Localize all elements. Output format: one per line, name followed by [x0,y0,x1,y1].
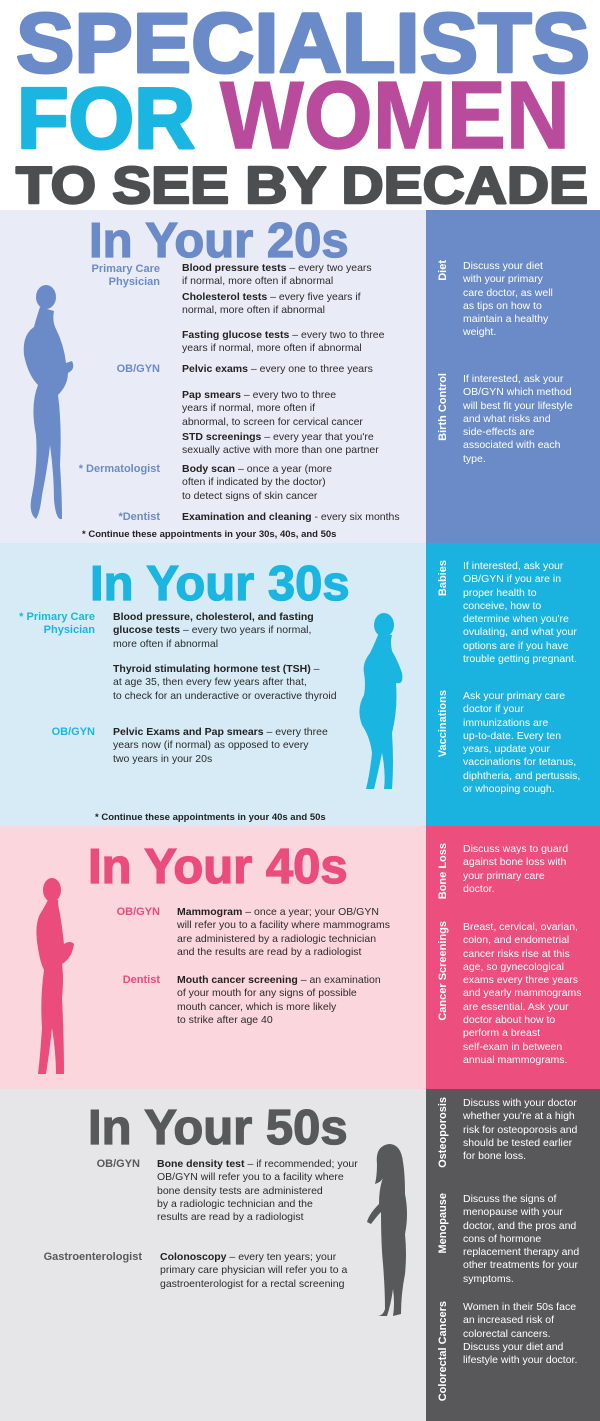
panel: 40s [0,826,600,1089]
panel: 20s: OB/GYN which method [463,386,572,398]
panel: 30s: Thyroid stimulating hormone test (TSH) – [113,663,320,675]
panel: 50s: lifestyle with your doctor. [463,1354,577,1366]
panel: 20s: Body scan – once a year (more [182,463,332,475]
panel: 20s: Fasting glucose tests – every two to three [182,329,384,341]
panel: 50s: results are read by a radiologist [157,1211,304,1223]
panel: 50s: Women in their 50s face [463,1301,576,1313]
panel: 30s: Ask your primary care [463,690,565,702]
panel: 30s: two years in your 20s [113,753,212,765]
panel: 40s: Mammogram – once a year; your OB/GYN [177,906,379,918]
sidebar items 20s: Diet [437,260,449,281]
panel: 40s: exams every three years [463,974,578,986]
sidebar 20s [426,210,600,543]
panel: 40s: age, so gynecological [463,961,564,973]
panel: 20s: side-effects are [463,426,535,438]
panel: 20s: Examination and cleaning - every six months [182,511,400,523]
panel: 50s: whether you're at a high [463,1110,575,1122]
panel: 50s: cons of hormone [463,1233,541,1245]
heading 40s: In Your 40s [88,840,348,894]
panel: 20s: STD screenings – every year that you're [182,431,374,443]
panel: 20s: If interested, ask your [463,373,563,385]
labels and tests 20s: Physician [109,276,160,288]
panel: 30s: diphtheria, and pertussis, [463,770,580,782]
panel: 30s: doctor if your [463,703,524,715]
panel: 40s: mouth cancer, which is more likely [177,1001,336,1013]
title line 2 [17,62,570,169]
panel: 40s: Cancer Screenings [437,921,449,1021]
labels and tests 30s [19,611,95,636]
panel: 40s: will refer you to a facility where mammograms [177,919,390,931]
panel: 20s: Pap smears – every two to three [182,389,336,401]
panel: 50s: bone density tests are administered [157,1185,323,1197]
panel: 40s: Breast, cervical, ovarian, [463,921,578,933]
panel: 20s: Pelvic exams – every one to three years [182,363,373,375]
panel: 40s: doctor about how to [463,1014,555,1026]
panel: 20s: Birth Control [437,373,449,441]
silhouette 30s [359,613,402,789]
labels and tests 40s: OB/GYN [117,906,160,918]
labels and tests 20s [92,263,160,288]
panel: 30s: Blood pressure, cholesterol, and fasting [113,611,314,623]
panel: 30s: glucose tests – every two years if normal, [113,624,311,636]
panel: 50s: Discuss the signs of [463,1193,556,1205]
title line 2: FOR [17,71,195,167]
panel: 50s: replacement therapy and [463,1246,579,1258]
panel: 50s: Discuss your diet and [463,1341,563,1353]
panel: 50s: for bone loss. [463,1150,526,1162]
panel: 50s: other treatments for your [463,1259,578,1271]
panel: 20s: years if normal, more often if [182,402,315,414]
silhouette 50s [367,1144,407,1316]
panel: 50s: should be tested earlier [463,1137,572,1149]
panel: 50s: gastroenterologist for a rectal screening [160,1278,344,1290]
silhouette 20s [24,285,74,520]
panel: 40s: and the results are read by a radiologist [177,946,361,958]
panel: 20s: often if indicated by the doctor) [182,476,326,488]
heading 20s: In Your 20s [89,214,349,268]
panel: 40s: Discuss ways to guard [463,843,568,855]
panel: 30s [0,543,600,826]
panel: 50s: symptoms. [463,1273,514,1285]
panel: 20s: to detect signs of skin cancer [182,490,317,502]
panel: 30s: trouble getting pregnant. [463,653,577,665]
panel: 20s: Discuss your diet [463,260,543,272]
panel: 20s: Cholesterol tests – every five years if [182,291,361,303]
panel: 40s: of your mouth for any signs of possible [177,987,357,999]
panel: 50s: Menopause [437,1193,449,1254]
panel: 50s: menopause with your [463,1206,563,1218]
panel: 20s: if normal, more often if abnormal [182,275,333,287]
panel: 50s [0,1089,600,1421]
panel: 50s: Gastroenterologist [44,1251,142,1263]
panel: 20s: OB/GYN [117,363,160,375]
panel: 40s: to strike after age 40 [177,1014,273,1026]
panel: 40s: perform a breast [463,1027,540,1039]
panel: 30s: or whooping cough. [463,783,555,795]
panel: 40s: self-exam in between [463,1041,562,1053]
panel: 20s: weight. [463,326,496,338]
panel: 40s: Mouth cancer screening – an examination [177,974,381,986]
sidebar items 40s: Bone Loss [437,843,449,899]
panel: 50s: Discuss with your doctor [463,1097,577,1109]
panel: 40s: your primary care [463,870,545,882]
panel: 30s: Pelvic Exams and Pap smears – every three [113,726,328,738]
note 30s: * Continue these appointments in your 40s and 50s [95,812,326,823]
panel: 20s [0,210,600,543]
panel: 30s: up-to-date. Every ten [463,730,561,742]
panel: 20s: will best fit your lifestyle [463,400,573,412]
panel: 30s: OB/GYN if you are in [463,573,561,585]
panel: 30s: at age 35, then every few years after that, [113,676,307,688]
panel: 40s: colon, and endometrial [463,934,569,946]
panel: 30s: ovulating, and what your [463,626,577,638]
panel: 20s: with your primary [463,273,543,285]
panel: 50s: an increased risk of [463,1314,554,1326]
labels and tests 20s: Primary Care [92,263,160,275]
panel: 30s: immunizations are [463,717,548,729]
panel: 30s: years, update your [463,743,550,755]
panel: 40s: against bone loss with [463,856,566,868]
panel: 50s: colorectal cancers. [463,1328,551,1340]
panel: 30s: proper health to [463,587,537,599]
heading 50s: In Your 50s [88,1101,348,1155]
panel: 30s: more often if abnormal [113,638,218,650]
panel: 30s: vaccinations for tetanus, [463,756,576,768]
panel: 30s: to check for an underactive or overactive thyroid [113,690,337,702]
panel: 50s: Colorectal Cancers [437,1301,449,1401]
labels and tests 30s: Physician [44,624,95,636]
heading 30s: In Your 30s [90,557,350,611]
panel: 30s: options are if you have [463,640,569,652]
panel: 20s: * Dermatologist [79,463,160,475]
panel: 20s: associated with each [463,439,560,451]
panel: 30s: OB/GYN [52,726,95,738]
panel: 20s: years if normal, more often if abnormal [182,342,362,354]
panel: 20s: maintain a healthy [463,313,548,325]
labels and tests 30s: * Primary Care [19,611,95,623]
panel: 50s: doctor, and the pros and [463,1220,576,1232]
panel: 40s: and yearly mammograms [463,987,581,999]
panel: 30s: If interested, ask your [463,560,563,572]
panel: 40s: Dentist [123,974,160,986]
panel: 20s: abnormal, to screen for cervical cancer [182,416,363,428]
panel: 30s: years now (if normal) as opposed to every [113,739,309,751]
sidebar 30s [426,543,600,826]
panel: 20s: Blood pressure tests – every two years [182,262,372,274]
panel: 30s: conceive, how to [463,600,541,612]
panel: 50s: Colonoscopy – every ten years; your [160,1251,336,1263]
panel: 20s: and what risks and [463,413,551,425]
panel: 50s: Bone density test – if recommended; your [157,1158,358,1170]
panel: 40s: are essential. Ask your [463,1001,569,1013]
panel: 20s: care doctor, as well [463,287,553,299]
sidebar items 30s: Babies [437,560,449,596]
panel: 50s: by a radiologic technician and the [157,1198,313,1210]
panel: 20s: normal, more often if abnormal [182,304,325,316]
sidebar 50s [426,1089,600,1421]
panel: 40s: doctor. [463,883,495,895]
panel: 40s: cancer risks rise at this [463,948,570,960]
panel: 40s: are administered by a radiologic technician [177,933,376,945]
panel: 30s: Vaccinations [437,690,449,757]
panel: 20s: as tips on how to [463,300,542,312]
sidebar items 50s: Osteoporosis [437,1097,449,1168]
labels and tests 50s: OB/GYN [97,1158,140,1170]
title [15,0,590,210]
title line 2: WOMEN [220,62,570,169]
panel: 20s: sexually active with more than one partner [182,444,379,456]
panel: 20s: type. [463,453,486,465]
silhouette 40s [36,878,74,1074]
panel: 40s: annual mammograms. [463,1054,567,1066]
panel: 50s: OB/GYN will refer you to a facility where [157,1171,344,1183]
panel: 30s: determine when you're [463,613,569,625]
sidebar 40s [426,826,600,1089]
panel: 50s: risk for osteoporosis and [463,1124,577,1136]
panel: 20s: *Dentist [118,511,160,523]
panel: 50s: primary care physician will refer you to a [160,1264,347,1276]
note 20s: * Continue these appointments in your 30s, 40s, and 50s [82,529,336,540]
